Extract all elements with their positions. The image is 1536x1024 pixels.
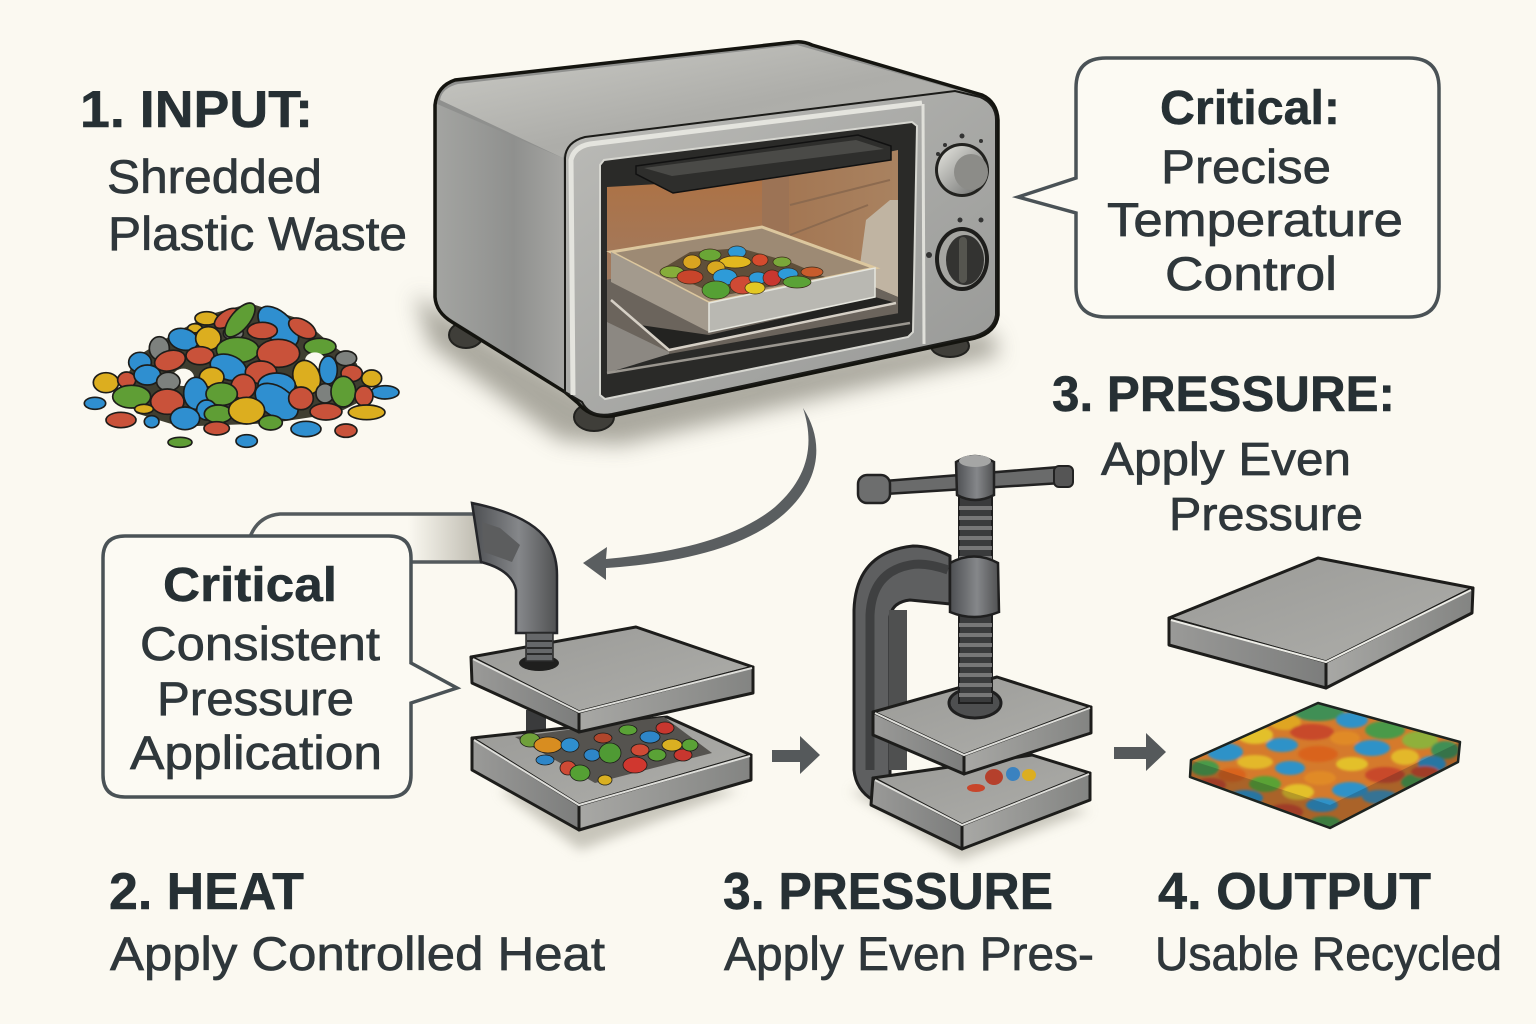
oven top bbox=[440, 45, 985, 158]
oven control panel knobs bbox=[926, 134, 989, 291]
callout: precise temperature control: Control bbox=[1165, 247, 1337, 300]
heading: step 1 input: Plastic Waste bbox=[108, 207, 407, 260]
oven rack and pan bbox=[640, 297, 896, 350]
icon: toaster oven bbox=[435, 42, 998, 431]
heading: pressure description: Pressure bbox=[1169, 488, 1363, 540]
icon: recycled plastic sheet bbox=[1190, 703, 1460, 830]
clamp frame bbox=[854, 546, 950, 800]
arrow: oven to heated press bbox=[583, 408, 816, 580]
label: step 4 output bbox=[1155, 863, 1502, 980]
oven body bbox=[435, 42, 998, 416]
callout: precise temperature control bbox=[1018, 58, 1439, 317]
tray inside bbox=[611, 227, 875, 303]
T handle bbox=[858, 455, 1073, 503]
oven heating element bbox=[636, 135, 891, 193]
oven floor bbox=[607, 240, 898, 373]
label: step 3 pressure bbox=[723, 863, 1094, 980]
knob tick marks bbox=[926, 134, 984, 258]
oven interior side wall bbox=[762, 150, 898, 297]
oven left side bbox=[437, 104, 565, 390]
callout: precise temperature control: Temperature bbox=[1107, 193, 1403, 246]
arrow: pressure to output bbox=[1114, 733, 1166, 771]
label: step 3 pressure: Apply Even Pres- bbox=[724, 927, 1094, 980]
pipe collar bbox=[519, 633, 559, 671]
oven feet bbox=[449, 322, 969, 431]
oven door window bbox=[600, 122, 917, 399]
icon: heat press bbox=[250, 503, 753, 830]
shadow under oven bbox=[415, 295, 1000, 445]
heading: step 1 input: Shredded bbox=[107, 150, 322, 203]
arrow: heat to pressure bbox=[772, 736, 820, 774]
temperature knob bbox=[935, 143, 989, 197]
heading: step 1 input: 1. INPUT: bbox=[80, 81, 313, 139]
heading: pressure description bbox=[1052, 366, 1395, 540]
callout: precise temperature control: Critical: bbox=[1160, 82, 1340, 135]
heading: step 1 input bbox=[80, 81, 407, 260]
label: step 2 heat bbox=[109, 863, 605, 980]
callout: consistent pressure application: Critical bbox=[163, 559, 337, 612]
plastic in tray bbox=[660, 246, 825, 299]
label: step 2 heat: 2. HEAT bbox=[109, 863, 304, 921]
timer knob bbox=[935, 227, 989, 291]
icon: pile of shredded plastic bbox=[84, 298, 399, 447]
upper plate bbox=[471, 627, 753, 732]
lower clamp plate bbox=[871, 755, 1090, 849]
lower post behind plate bbox=[526, 710, 546, 736]
icon: upper steel plate bbox=[1169, 558, 1473, 688]
label: step 3 pressure: 3. PRESSURE bbox=[723, 863, 1053, 921]
callout: consistent pressure application: Pressure bbox=[157, 672, 354, 725]
molten plastic in press bbox=[515, 717, 712, 785]
pipe duct behind callout bbox=[250, 514, 482, 562]
shadow under clamp bbox=[850, 790, 1090, 860]
shadow under heat press bbox=[500, 780, 740, 850]
callout: consistent pressure application bbox=[103, 536, 457, 797]
label: step 2 heat: Apply Controlled Heat bbox=[110, 927, 605, 980]
screw collar bbox=[949, 688, 1001, 718]
oven interior back wall bbox=[607, 178, 762, 280]
pipe elbow bbox=[472, 503, 557, 633]
label: step 4 output: 4. OUTPUT bbox=[1158, 863, 1431, 921]
baking tray bbox=[611, 227, 875, 332]
plastic under clamp bbox=[967, 767, 1036, 792]
heading: pressure description: Apply Even bbox=[1101, 433, 1351, 485]
callout: consistent pressure application: Consistent bbox=[140, 617, 380, 670]
upper clamp plate bbox=[873, 677, 1091, 774]
heading: pressure description: 3. PRESSURE: bbox=[1052, 366, 1395, 422]
tray left face bbox=[611, 252, 709, 332]
tray front face bbox=[709, 268, 875, 332]
threaded screw bbox=[959, 495, 992, 703]
callout: consistent pressure application: Application bbox=[130, 726, 382, 779]
lower plate bbox=[472, 717, 751, 830]
oven front frame bbox=[565, 91, 996, 415]
label: step 4 output: Usable Recycled bbox=[1155, 927, 1502, 980]
icon: screw clamp press bbox=[854, 455, 1091, 849]
clamp nut bbox=[950, 556, 999, 617]
callout: precise temperature control: Precise bbox=[1161, 140, 1331, 193]
